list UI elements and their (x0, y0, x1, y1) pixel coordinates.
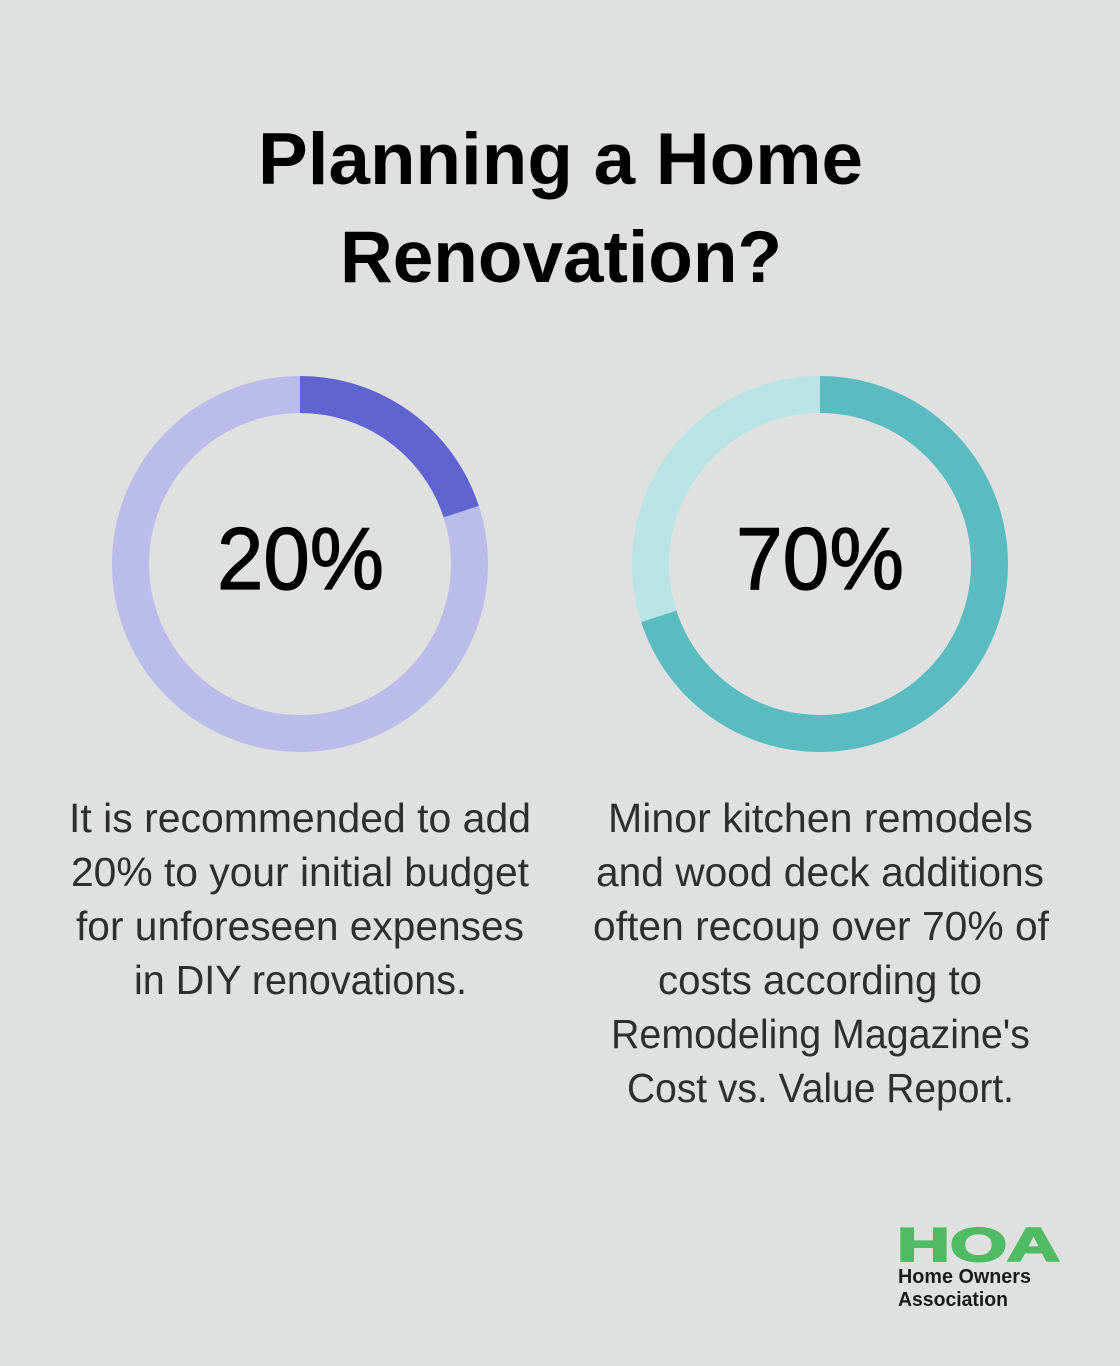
description: 20% budget: in DIY renovations. (134, 957, 467, 1003)
title: Planning a Home (258, 119, 863, 200)
title: Renovation? (340, 217, 782, 298)
logo: Home Owners Association: Home Owners (898, 1266, 1031, 1288)
donut chart: 20% (130, 394, 470, 734)
panel: 70% cost recoup statistic (593, 394, 1050, 1111)
logo: Home Owners Association: HOA (897, 1218, 1060, 1271)
donut chart: 70% (650, 394, 990, 734)
description: 20% budget: 20% to your initial budget (71, 849, 530, 895)
value: 20%: 20% (217, 509, 384, 608)
description: 20% budget: It is recommended to add (69, 795, 531, 841)
description: 70% recoup: often recoup over 70% of (593, 903, 1050, 949)
title (258, 119, 863, 298)
description: 70% recoup: Cost vs. Value Report. (627, 1065, 1014, 1111)
description: 70% recoup (593, 795, 1050, 1111)
logo: Home Owners Association: Association (898, 1289, 1008, 1311)
description: 70% recoup: Remodeling Magazine's (611, 1011, 1030, 1057)
value: 70%: 70% (736, 509, 904, 608)
description: 70% recoup: and wood deck additions (596, 849, 1044, 895)
description: 20% budget (69, 795, 531, 1003)
logo: Home Owners Association (897, 1218, 1060, 1311)
panel: 20% budget statistic (69, 394, 531, 1003)
description: 20% budget: for unforeseen expenses (76, 903, 524, 949)
description: 70% recoup: Minor kitchen remodels (608, 795, 1033, 841)
description: 70% recoup: costs according to (658, 957, 982, 1003)
